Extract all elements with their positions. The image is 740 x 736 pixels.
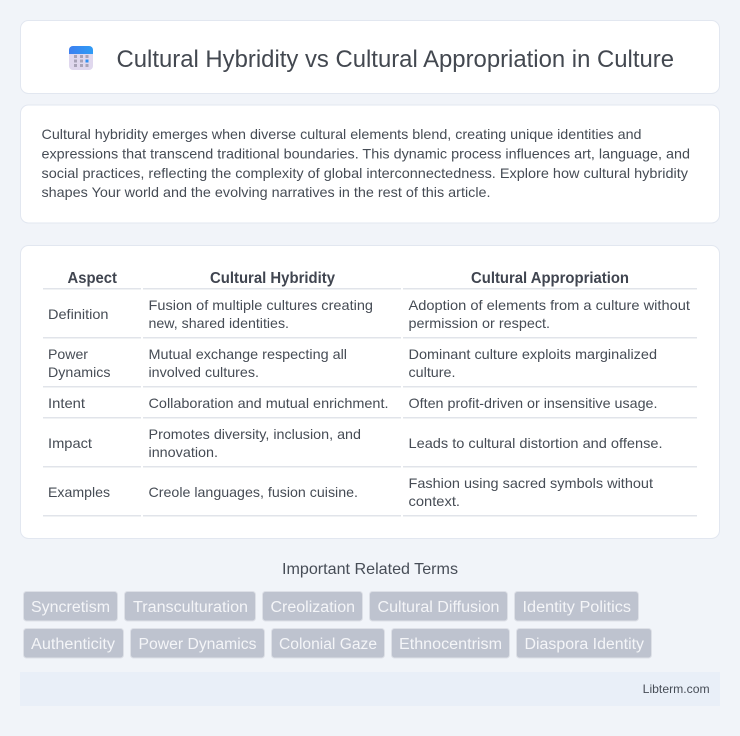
tag: Creolization: Creolization [270, 599, 355, 616]
table header: Cultural Appropriation [471, 270, 629, 287]
row: definition: new, shared identities. [148, 315, 289, 331]
tag: Diaspora Identity [516, 628, 652, 658]
table header: Cultural Hybridity [210, 270, 335, 287]
row: examples: Creole languages, fusion cuisine. [148, 484, 358, 500]
tag: Syncretism: Syncretism [31, 599, 110, 616]
row: power dynamics [43, 346, 697, 388]
tag: Identity Politics [514, 592, 638, 621]
tag: Power Dynamics [130, 628, 264, 658]
row: intent: Collaboration and mutual enrichment. [148, 395, 388, 411]
tag: Diaspora Identity: Diaspora Identity [524, 636, 644, 653]
row: intent: Intent [48, 395, 85, 411]
table header [43, 270, 697, 290]
footer bar [20, 672, 720, 706]
row: power dynamics: involved cultures. [148, 364, 259, 380]
panel: title card [20, 20, 720, 94]
row: power dynamics: Mutual exchange respecting all [148, 346, 347, 362]
tag: Creolization [262, 592, 362, 621]
tag: Cultural Diffusion [370, 592, 508, 621]
row: examples: context. [408, 493, 460, 509]
row: definition: Definition [48, 306, 108, 322]
row: definition: permission or respect. [408, 315, 550, 331]
row: examples [43, 475, 697, 516]
heading: related terms: Important Related Terms [282, 561, 458, 578]
tag: Transculturation: Transculturation [133, 599, 248, 616]
row: impact: Leads to cultural distortion and offense. [408, 435, 662, 451]
row: power dynamics: culture. [408, 364, 456, 380]
tag: Transculturation [124, 592, 256, 621]
row: intent [43, 395, 697, 418]
tag: Authenticity: Authenticity [31, 636, 115, 653]
footer credit: Libterm.com [643, 682, 710, 696]
row: impact: Promotes diversity, inclusion, and [148, 426, 361, 442]
icon: calendar [69, 46, 93, 70]
tag: Authenticity [24, 628, 124, 658]
tag: Colonial Gaze [272, 628, 384, 658]
row: power dynamics: Dominant culture exploits marginalized [408, 346, 657, 362]
tag: Syncretism [24, 592, 118, 621]
row: impact: Impact [48, 435, 92, 451]
row: definition [43, 297, 697, 338]
table header: Aspect [68, 270, 117, 287]
tag: Cultural Diffusion: Cultural Diffusion [378, 599, 500, 616]
row: examples: Examples [48, 484, 110, 500]
panel: related term tags [24, 592, 652, 658]
panel: comparison table card [20, 246, 720, 538]
intro paragraph: shapes Your world and the evolving narratives in the rest of this article. [42, 184, 491, 200]
row: definition: Fusion of multiple cultures creating [148, 297, 373, 313]
row: impact [43, 426, 697, 468]
row: impact: innovation. [148, 444, 218, 460]
panel: intro text card [20, 105, 720, 223]
row: definition: Adoption of elements from a culture without [408, 297, 690, 313]
row: examples: Fashion using sacred symbols without [408, 475, 653, 491]
tag: Identity Politics: Identity Politics [522, 599, 631, 616]
tag: Ethnocentrism: Ethnocentrism [399, 636, 502, 653]
tag: Colonial Gaze: Colonial Gaze [279, 636, 377, 653]
intro paragraph: expressions that transcend traditional boundaries. This dynamic process influences art, language, and [42, 146, 690, 162]
tag: Power Dynamics: Power Dynamics [138, 636, 257, 653]
title: Cultural Hybridity vs Cultural Appropriation in Culture [116, 46, 674, 73]
row: power dynamics: Power [48, 346, 88, 362]
intro paragraph [42, 126, 690, 200]
intro paragraph: social practices, reflecting the complexity of global interconnectedness. Explore how cultural hybridity [42, 165, 688, 181]
row: power dynamics: Dynamics [48, 364, 110, 380]
intro paragraph: Cultural hybridity emerges when diverse cultural elements blend, creating unique identities and [42, 126, 642, 142]
row: intent: Often profit-driven or insensitive usage. [408, 395, 658, 411]
tag: Ethnocentrism [392, 628, 510, 658]
